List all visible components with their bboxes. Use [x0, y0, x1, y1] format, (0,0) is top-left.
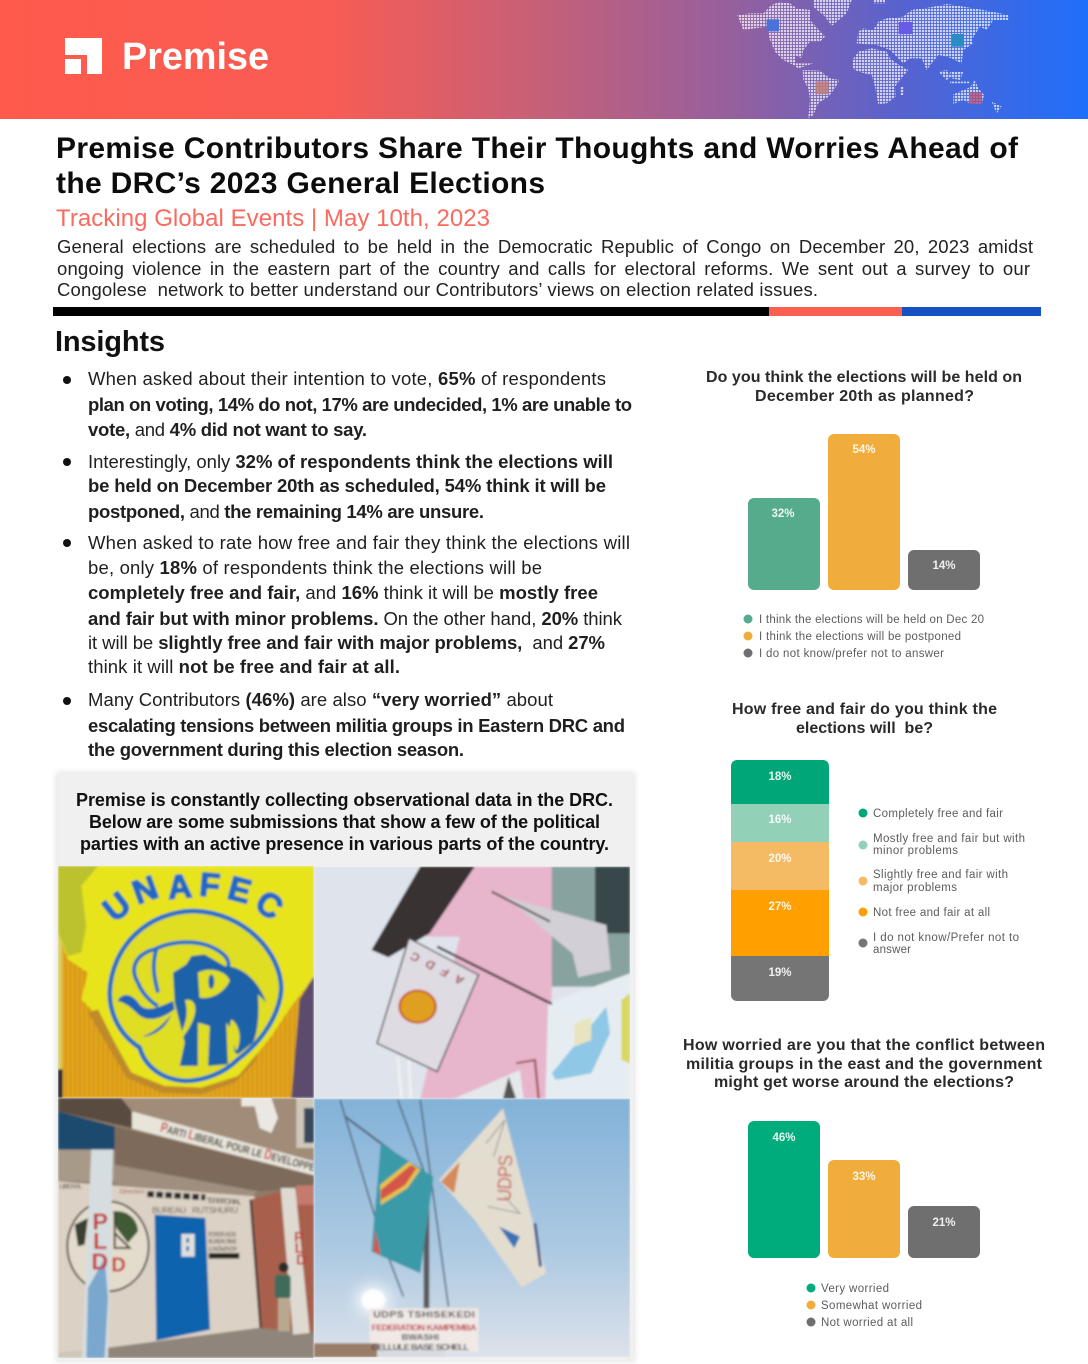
intro paragraph: Congolese network to better understand our Contributors’ views on election related issues. — [57, 279, 818, 300]
photo: PLD party office: BUREAU RUTSHURU — [152, 1205, 238, 1215]
bullet: election date: postponed, and the remaining 14% are unsure. — [88, 501, 484, 522]
bars: 14% — [932, 560, 956, 572]
bullet: very worried: the government during this election season. — [88, 739, 464, 760]
photo: PLD party office: LUNDI VENDR — [208, 1246, 238, 1253]
callout text: Below are some submissions that show a few of the political — [89, 812, 600, 832]
photo: PLD party office: L — [93, 1228, 107, 1254]
bars: 33% — [852, 1171, 876, 1183]
bars — [748, 434, 980, 590]
bars: 54% — [852, 444, 876, 456]
legend: answer — [873, 944, 911, 956]
title: Premise Contributors Share Their Thoughts and Worries Ahead of — [56, 132, 1019, 165]
title — [56, 132, 1019, 200]
callout text: Premise is constantly collecting observational data in the DRC. — [76, 790, 613, 810]
chart title — [732, 701, 997, 737]
bars: 21% — [932, 1217, 956, 1229]
bullet: very worried — [63, 689, 625, 760]
photo: PLD party office: FORD FUNDS — [208, 1231, 236, 1238]
photo: PLD party office: D — [111, 1254, 126, 1276]
legend: I do not know/prefer not to answer — [759, 648, 944, 660]
photo: PLD party office: D — [296, 1253, 307, 1269]
bullet: very worried: Many Contributors (46%) are also “very worried” about — [88, 689, 553, 710]
photo: PLD party office: P — [294, 1230, 304, 1246]
legend — [806, 1283, 922, 1329]
chart: how worried about conflict — [683, 1037, 1045, 1329]
heading: Insights: Insights — [55, 326, 165, 358]
photo: UDPS flags: BWASHI — [401, 1332, 439, 1342]
legend: Very worried — [821, 1283, 889, 1295]
legend: Somewhat worried — [821, 1300, 922, 1312]
icon: Premise logo mark — [65, 38, 102, 74]
bullet: intention to vote: When asked about their intention to vote, 65% of respondents — [88, 368, 606, 389]
chart title — [683, 1037, 1045, 1091]
legend — [858, 808, 1025, 956]
stacked bar — [731, 760, 829, 1001]
bullet: free and fair: be, only 18% of respondents think the elections will be — [88, 557, 542, 578]
photo: PLD party office: P — [92, 1208, 108, 1234]
stacked bar: 20% — [768, 853, 792, 865]
photo: party flag on pink building: AFDC — [407, 949, 467, 987]
bullet: intention to vote: plan on voting, 14% do not, 17% are undecided, 1% are unable to — [88, 394, 632, 415]
chart title: militia groups in the east and the government — [686, 1056, 1043, 1073]
bullet: free and fair: it will be slightly free and fair with major problems, and 27% — [88, 632, 605, 653]
legend: Mostly free and fair but with — [873, 833, 1025, 845]
legend — [744, 614, 984, 660]
chart title: December 20th as planned? — [755, 388, 974, 405]
divider bar — [53, 307, 1041, 316]
stacked bar: 27% — [768, 901, 792, 913]
bullet: election date: be held on December 20th as scheduled, 54% think it will be — [88, 475, 606, 496]
photo: PLD party office: BUREAU TIME — [208, 1239, 237, 1246]
bullet: free and fair: completely free and fair, and 16% think it will be mostly free — [88, 582, 598, 603]
photo: PLD party office: D — [91, 1248, 108, 1274]
chart title: Do you think the elections will be held on — [706, 369, 1022, 386]
photo: UDPS flags: FEDERATION KAMPEMBA — [371, 1323, 477, 1332]
legend: major problems — [873, 882, 957, 894]
bars: 46% — [772, 1132, 796, 1144]
bullet: intention to vote — [63, 368, 632, 440]
chart: how free and fair — [731, 701, 1025, 1001]
photo: PLD party office: PARTI LIBERAL POUR LE DEVELOPPE — [159, 1119, 317, 1174]
icon: dotted world map — [737, 0, 1008, 118]
intro paragraph: ongoing violence in the eastern part of the country and calls for electoral reforms. We sent out a survey to our — [57, 258, 1030, 279]
photo: UDPS flags: UDPS TSHISEKEDI — [373, 1310, 475, 1320]
stacked bar: 16% — [768, 814, 792, 826]
chart title: elections will be? — [796, 720, 933, 737]
photo: PLD party office: Direction — [120, 1189, 145, 1196]
panel: photo submissions — [56, 772, 635, 1362]
bullet: very worried: escalating tensions between militia groups in Eastern DRC and — [88, 715, 625, 736]
photo: PLD party office: L — [295, 1241, 304, 1257]
logo wordmark: Premise — [122, 36, 269, 78]
bullet: free and fair: and fair but with minor problems. On the other hand, 20% think — [88, 608, 623, 629]
photo: PLD party office: LIBERAL — [60, 1184, 83, 1191]
bullet: free and fair — [63, 532, 630, 677]
stacked bar: 18% — [768, 771, 792, 783]
chart: will elections be held on Dec 20 — [706, 369, 1022, 660]
bullet: free and fair: think it will not be free and fair at all. — [88, 656, 400, 677]
legend: Slightly free and fair with — [873, 869, 1008, 881]
subtitle: Tracking Global Events | May 10th, 2023 — [56, 205, 490, 232]
bullet: election date: Interestingly, only 32% of respondents think the elections will — [88, 451, 613, 472]
chart title: How worried are you that the conflict between — [683, 1037, 1045, 1054]
chart title: might get worse around the elections? — [714, 1074, 1014, 1091]
legend: Not worried at all — [821, 1317, 913, 1329]
legend: I think the elections will be held on Dec 20 — [759, 614, 984, 626]
stacked bar: 19% — [768, 967, 792, 979]
photo: PLD party office — [58, 1098, 317, 1358]
photo: UDPS flags: UDPS — [492, 1154, 517, 1202]
chart title: How free and fair do you think the — [732, 701, 997, 718]
photo: party flag on pink building — [314, 867, 630, 1099]
photo: UDPS flags — [314, 1099, 630, 1357]
callout text: parties with an active presence in various parts of the country. — [80, 834, 609, 854]
bullet: election date — [63, 451, 613, 522]
bars — [748, 1121, 980, 1258]
photo: UNAFEC banner: UNAFEC — [96, 866, 289, 929]
intro paragraph — [57, 236, 1033, 300]
bars: 32% — [771, 508, 795, 520]
header banner — [0, 0, 1088, 119]
title: the DRC’s 2023 General Elections — [56, 167, 545, 200]
legend: Completely free and fair — [873, 808, 1003, 820]
photo: UDPS flags: CELLULE BASE SCHELL — [371, 1342, 470, 1352]
insights bullet list — [63, 368, 632, 760]
legend: minor problems — [873, 845, 958, 857]
legend: I think the elections will be postponed — [759, 631, 961, 643]
bullet: intention to vote: vote, and 4% did not want to say. — [88, 419, 367, 440]
photo: PLD party office: TERRITORIAL — [206, 1196, 242, 1206]
photo: UNAFEC banner — [58, 866, 314, 1098]
bullet: free and fair: When asked to rate how free and fair they think the elections will — [88, 532, 630, 553]
legend: Not free and fair at all — [873, 907, 990, 919]
legend: I do not know/Prefer not to — [873, 932, 1019, 944]
callout text — [76, 790, 613, 854]
chart title — [706, 369, 1022, 405]
intro paragraph: General elections are scheduled to be held in the Democratic Republic of Congo on December 20, 2023 amidst — [57, 236, 1033, 257]
